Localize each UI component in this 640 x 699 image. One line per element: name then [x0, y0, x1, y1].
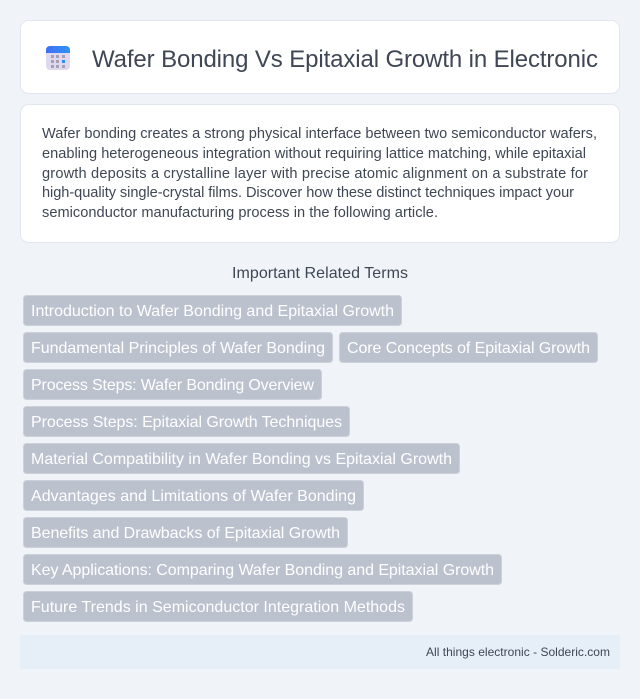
tag list: [24, 296, 598, 622]
text block: description: enabling heterogeneous integration without requiring lattice matching, while epitaxial: [42, 146, 586, 162]
tag: key applications: [24, 554, 502, 584]
tag: introduction: [24, 296, 402, 326]
title: Wafer Bonding Vs Epitaxial Growth in Electronic: [92, 46, 598, 73]
footer text: All things electronic - Solderic.com: [426, 645, 610, 659]
tag: benefits: [24, 518, 348, 548]
tag: advantages: [24, 480, 364, 510]
tag: wafer bonding process: Process Steps: Wafer Bonding Overview: [31, 377, 314, 394]
text block: description: high-quality single-crystal films. Discover how these distinct techniques impact your: [42, 185, 574, 201]
icon: calendar grid: [46, 46, 70, 70]
tag: introduction: Introduction to Wafer Bonding and Epitaxial Growth: [31, 303, 394, 320]
text block: description: Wafer bonding creates a strong physical interface between two semiconductor wafers,: [42, 126, 597, 142]
panel: intro paragraph: [20, 104, 620, 242]
tag: material compatibility: Material Compatibility in Wafer Bonding vs Epitaxial Growth: [31, 451, 452, 468]
tag: fundamental principles: [24, 332, 332, 362]
tag: future trends: Future Trends in Semiconductor Integration Methods: [31, 599, 405, 616]
tag: material compatibility: [24, 444, 460, 474]
tag: wafer bonding process: [24, 370, 322, 400]
panel: header card: [20, 20, 620, 94]
tag: epitaxial techniques: [24, 406, 350, 436]
text block: description: growth deposits a crystalline layer with precise atomic alignment on a substrate for: [42, 166, 588, 182]
tag: core concepts: Core Concepts of Epitaxial Growth: [347, 340, 590, 357]
tag: advantages: Advantages and Limitations of Wafer Bonding: [31, 488, 356, 505]
tag: benefits: Benefits and Drawbacks of Epitaxial Growth: [31, 525, 340, 542]
tag: fundamental principles: Fundamental Principles of Wafer Bonding: [31, 340, 325, 357]
tag: key applications: Key Applications: Comparing Wafer Bonding and Epitaxial Growth: [31, 562, 494, 579]
heading: important related terms: Important Related Terms: [232, 265, 408, 282]
tag: epitaxial techniques: Process Steps: Epitaxial Growth Techniques: [31, 414, 342, 431]
text block: description: [42, 126, 597, 221]
text block: description: semiconductor manufacturing process in the following article.: [42, 205, 438, 221]
tag: future trends: [24, 592, 412, 622]
footer: [20, 635, 620, 669]
tag: core concepts: [340, 332, 598, 362]
